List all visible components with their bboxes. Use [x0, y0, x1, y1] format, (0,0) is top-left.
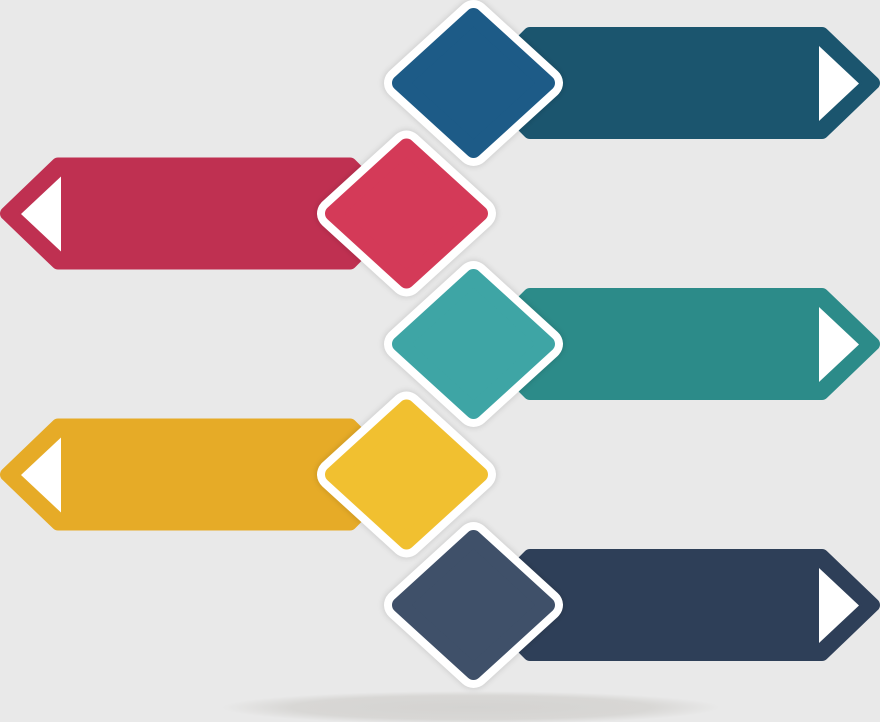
arrow banner 2: crimson, pointing left	[7, 164, 399, 262]
arrow banner 5: navy, pointing right	[481, 556, 873, 654]
arrow icon 4	[21, 438, 61, 512]
floor shadow	[222, 691, 720, 722]
diamond 5: slate	[400, 538, 547, 672]
arrow icon 5	[819, 568, 859, 643]
arrow icon 1	[819, 46, 859, 121]
diamond 3: aqua	[400, 277, 547, 411]
arrow icon 3	[819, 307, 859, 382]
diamond 2: red	[333, 146, 480, 280]
arrow banner 1: dark teal, pointing right	[481, 34, 873, 132]
diamond 1: blue	[400, 16, 547, 150]
arrow banner 3: teal, pointing right	[481, 295, 873, 393]
diamond 4: yellow	[333, 408, 480, 542]
arrow banner 4: amber, pointing left	[7, 426, 399, 524]
arrow icon 2	[21, 176, 61, 252]
